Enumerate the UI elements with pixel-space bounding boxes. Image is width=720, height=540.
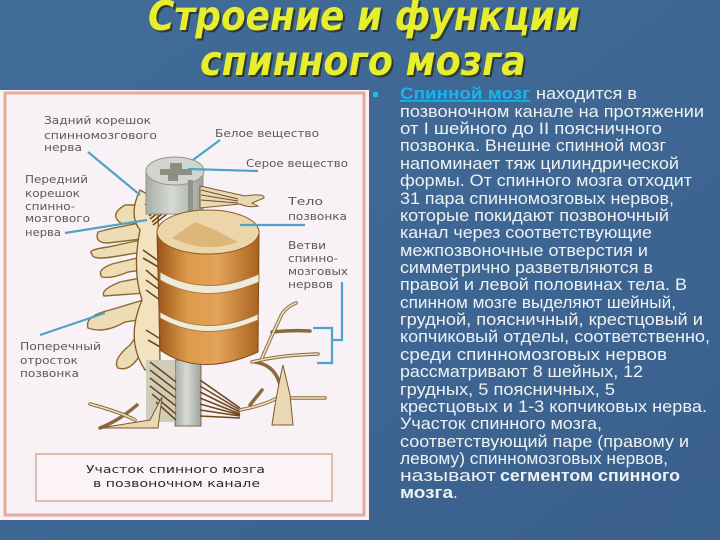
text block: description: канал через соответствующие: [400, 223, 652, 242]
text block: description: от I шейного до II поясничного: [400, 119, 662, 138]
leader lines: [40, 140, 342, 363]
text block: description: мозга: [400, 483, 454, 502]
diagram labels: мозговых: [288, 266, 348, 278]
title: [148, 0, 582, 87]
text block: description: позвонка. Внешне спинной мозг: [400, 136, 666, 155]
text block: description: симметрично разветвляются в: [400, 258, 653, 277]
diagram labels: Белое вещество: [215, 128, 319, 140]
caption box: [36, 454, 332, 501]
diagram labels: Ветви: [288, 240, 326, 252]
caption box: в позвоночном канале: [93, 477, 260, 490]
diagram labels: нерва: [25, 227, 61, 239]
diagram labels: Задний корешок: [44, 115, 151, 127]
diagram labels: [20, 115, 348, 380]
illustration: spine and nerves: [87, 157, 325, 428]
title: спинного мозга: [202, 39, 528, 87]
diagram labels: мозгового: [25, 213, 90, 225]
text block: description: сегментом спинного: [500, 466, 680, 485]
text block: description: находится в: [536, 84, 637, 103]
link term: Спинной мозг: [400, 84, 530, 103]
text block: description: грудных, 5 поясничных, 5: [400, 380, 615, 399]
text block: description: правой и левой половинах тела. В: [400, 275, 687, 294]
text block: description: 31 пара спинномозговых нервов,: [400, 189, 674, 208]
vertebral bodies: [157, 210, 259, 365]
text block: description: грудной, поясничный, крестцовый и: [400, 310, 703, 329]
diagram labels: отросток: [20, 355, 78, 367]
diagram labels: спинномозгового: [44, 130, 157, 142]
diagram labels: позвонка: [20, 368, 79, 380]
left vertebral processes: [87, 205, 160, 369]
text block: description: среди спинномозговых нервов: [400, 345, 667, 364]
diagram labels: Передний: [25, 174, 88, 186]
cord lower segment: [175, 360, 201, 426]
title: спинного мозга: [200, 37, 526, 85]
text block: description: .: [453, 483, 458, 502]
lower right process: [272, 365, 293, 425]
text block: description: которые покидают позвоночный: [400, 206, 669, 225]
diagram labels: Серое вещество: [246, 158, 348, 170]
text block: description: напоминает тяж цилиндрической: [400, 154, 679, 173]
text block: description: называют: [400, 466, 496, 485]
diagram labels: нервов: [288, 279, 333, 291]
diagram labels: нерва: [44, 142, 82, 154]
panel: spinal cord illustration: [0, 90, 369, 520]
text block: description: [400, 84, 710, 502]
text block: description: копчиковый отделы, соответственно,: [400, 327, 710, 346]
caption box: Участок спинного мозга: [86, 463, 265, 476]
text block: description: левому) спинномозговых нервов,: [400, 449, 668, 468]
diagram labels: спинно-: [288, 253, 338, 265]
diagram labels: Тело: [287, 196, 323, 208]
text block: description: крестцовых и 1-3 копчиковых нерва.: [400, 397, 707, 416]
text block: description: рассматривают 8 шейных, 12: [400, 362, 643, 381]
lower left process: [100, 397, 162, 428]
text block: description: позвоночном канале на протяжении: [400, 102, 704, 121]
text block: description: Участок спинного мозга,: [400, 414, 602, 433]
text block: description: межпозвоночные отверстия и: [400, 241, 648, 260]
text block: description: спинном мозге выделяют шейный,: [400, 293, 676, 312]
diagram labels: Поперечный: [20, 341, 101, 353]
right nerve branches: [90, 303, 325, 428]
spinal cord upper cylinder: [146, 157, 204, 214]
left nerve mass: [134, 190, 160, 370]
diagram labels: позвонка: [288, 211, 347, 223]
text block: description: формы. От спинного мозга отходит: [400, 171, 692, 190]
diagram labels: корешок: [25, 188, 80, 200]
bullet: [373, 92, 378, 97]
right nerve root: [200, 186, 264, 208]
text block: description: соответствующий паре (правому и: [400, 432, 689, 451]
diagram labels: спинно-: [25, 201, 75, 213]
nerve fibres: [143, 186, 240, 420]
